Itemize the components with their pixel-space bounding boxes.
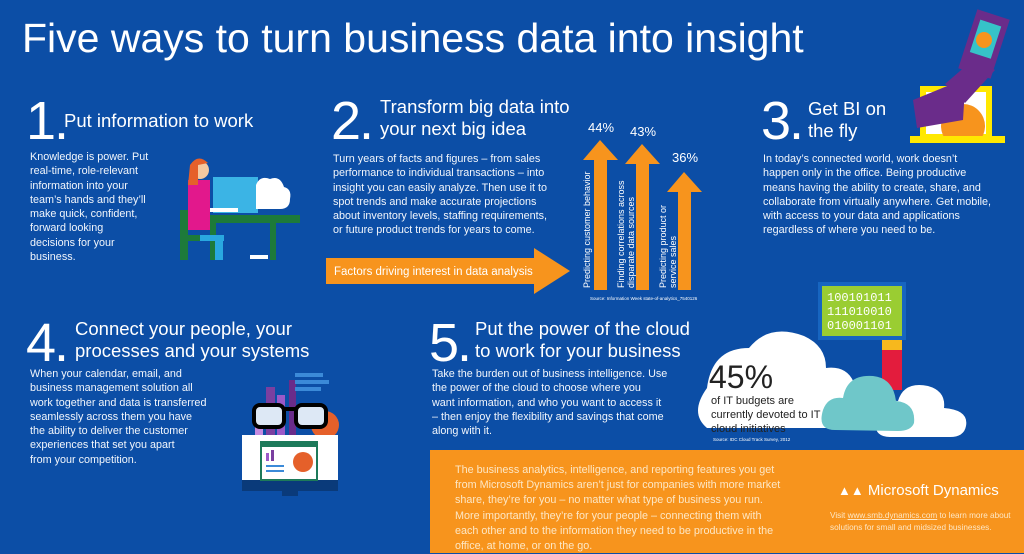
- footer text: office, at home, or on the go.: [455, 540, 592, 552]
- illustration: clouds with 45% stat: currently devoted to IT: [711, 409, 821, 421]
- body 1: Knowledge is power. Put: [30, 151, 148, 163]
- body 5: the power of the cloud to choose where you: [432, 382, 641, 394]
- section 3: [761, 91, 991, 236]
- number 1: 1.: [26, 91, 67, 151]
- heading 5: Put the power of the cloud: [475, 318, 690, 339]
- body 2: insight you can easily analyze. Then use it to: [333, 182, 547, 194]
- heading 3: [808, 98, 886, 141]
- body 2: spot trends and make accurate projections: [333, 196, 536, 208]
- body 3: In today’s connected world, work doesn’t: [763, 153, 957, 165]
- body 4: business management solution all: [30, 382, 193, 394]
- body 2: performance to individual transactions – into: [333, 167, 544, 179]
- illustration: clouds with 45% stat: [698, 282, 966, 442]
- illustration: glasses and monitor: [242, 373, 339, 496]
- footer text: from Microsoft Dynamics aren’t just for companies with more market: [455, 479, 780, 491]
- body 1: decisions for your: [30, 237, 115, 249]
- arrow: factors driving interest: Factors driving interest in data analysis: [334, 266, 533, 278]
- body 2: or future product trends for years to come.: [333, 224, 535, 236]
- body 5: [432, 368, 667, 437]
- arrow: factors driving interest: [326, 248, 570, 294]
- section 2: [331, 91, 570, 236]
- body 3: regardless of where you need to be.: [763, 224, 935, 236]
- heading 2: your next big idea: [380, 118, 526, 139]
- body 1: forward looking: [30, 222, 103, 234]
- body 3: with access to your data and applications: [763, 210, 960, 222]
- section 4: [26, 313, 309, 466]
- body 1: information into your: [30, 180, 128, 192]
- chart: vertical arrows: 36%: [672, 150, 698, 165]
- body 1: business.: [30, 251, 76, 263]
- heading 3: Get BI on: [808, 98, 886, 119]
- illustration: clouds with 45% stat: 111010010: [827, 305, 892, 319]
- number 2: 2.: [331, 91, 372, 151]
- logo: Microsoft Dynamics: ▲▲ Microsoft Dynamics: [838, 482, 999, 499]
- illustration: clouds with 45% stat: 100101011: [827, 291, 892, 305]
- body 2: Turn years of facts and figures – from sales: [333, 153, 540, 165]
- heading 2: Transform big data into: [380, 96, 570, 117]
- body 5: Take the burden out of business intelligence. Use: [432, 368, 667, 380]
- body 3: collaborate from virtually anywhere. Get mobile,: [763, 196, 991, 208]
- illustration: clouds with 45% stat: 45%: [709, 359, 773, 395]
- body 4: experiences that set you apart: [30, 439, 175, 451]
- chart: vertical arrows: [582, 120, 702, 301]
- title: Five ways to turn business data into insight: [22, 15, 804, 61]
- body 3: [763, 153, 991, 236]
- footer text: The business analytics, intelligence, and reporting features you get: [455, 464, 774, 476]
- chart: vertical arrows: 44%: [588, 120, 614, 135]
- heading 5: [475, 318, 690, 361]
- body 5: along with it.: [432, 425, 492, 437]
- footer text: More importantly, they’re for your people – connecting them with: [455, 510, 761, 522]
- heading 4: [75, 318, 309, 361]
- footer text: each other and to the information they need to be productive in the: [455, 525, 773, 537]
- body 3: happen only in the office. Being productive: [763, 167, 966, 179]
- body 1: [30, 151, 148, 263]
- chart: vertical arrows: disparate data sources: [626, 196, 636, 288]
- body 2: about inventory levels, staffing requirements,: [333, 210, 547, 222]
- body 4: the ability to deliver the customer: [30, 425, 188, 437]
- orange footer panel: [430, 450, 1024, 553]
- illustration: clouds with 45% stat: cloud initiatives: [711, 423, 786, 435]
- chart: vertical arrows: 43%: [630, 124, 656, 139]
- body 4: from your competition.: [30, 454, 137, 466]
- chart: vertical arrows: Predicting customer behavior: [582, 171, 592, 288]
- heading 1: Put information to work: [64, 110, 253, 131]
- body 4: work together and data is transferred: [30, 397, 206, 409]
- illustration: woman at computer: [180, 158, 300, 260]
- section 1: [26, 91, 254, 263]
- heading 4: processes and your systems: [75, 340, 309, 361]
- number 3: 3.: [761, 91, 802, 151]
- heading 3: the fly: [808, 120, 857, 141]
- visit text: [830, 511, 1011, 532]
- body 5: – then enjoy the flexibility and savings that come: [432, 411, 664, 423]
- heading 5: to work for your business: [475, 340, 681, 361]
- visit text: Visit www.smb.dynamics.com to learn more about: [830, 511, 1011, 520]
- chart: vertical arrows: Source: Information Week state-of-analytics_7540126: [590, 296, 698, 301]
- illustration: hand with phone and laptop: [910, 9, 1010, 143]
- chart: vertical arrows: service sales: [668, 235, 678, 288]
- body 3: means having the ability to create, share, and: [763, 182, 981, 194]
- body 1: make quick, confident,: [30, 208, 137, 220]
- number 4: 4.: [26, 313, 67, 373]
- body 5: want information, and who you want to access it: [432, 397, 661, 409]
- body 1: real-time, role-relevant: [30, 165, 138, 177]
- body 4: [30, 368, 206, 466]
- heading 4: Connect your people, your: [75, 318, 292, 339]
- illustration: clouds with 45% stat: 010001101: [827, 319, 892, 333]
- number 5: 5.: [429, 313, 470, 373]
- footer text: [455, 464, 780, 552]
- heading 2: [380, 96, 570, 139]
- body 4: When your calendar, email, and: [30, 368, 182, 380]
- body 1: team’s hands and they’ll: [30, 194, 146, 206]
- illustration: clouds with 45% stat: of IT budgets are: [711, 395, 794, 407]
- body 4: seamlessly across them you have: [30, 411, 192, 423]
- footer text: share, they’re for you – no matter what type of business you run.: [455, 494, 763, 506]
- section 5: [429, 313, 690, 437]
- body 2: [333, 153, 547, 236]
- illustration: clouds with 45% stat: Source: IDC Cloud Track Survey, 2012: [713, 437, 791, 442]
- visit text: solutions for small and midsized businesses.: [830, 522, 992, 532]
- chart: vertical arrows: Finding correlations across: [616, 180, 626, 288]
- chart: vertical arrows: Predicting product or: [658, 205, 668, 288]
